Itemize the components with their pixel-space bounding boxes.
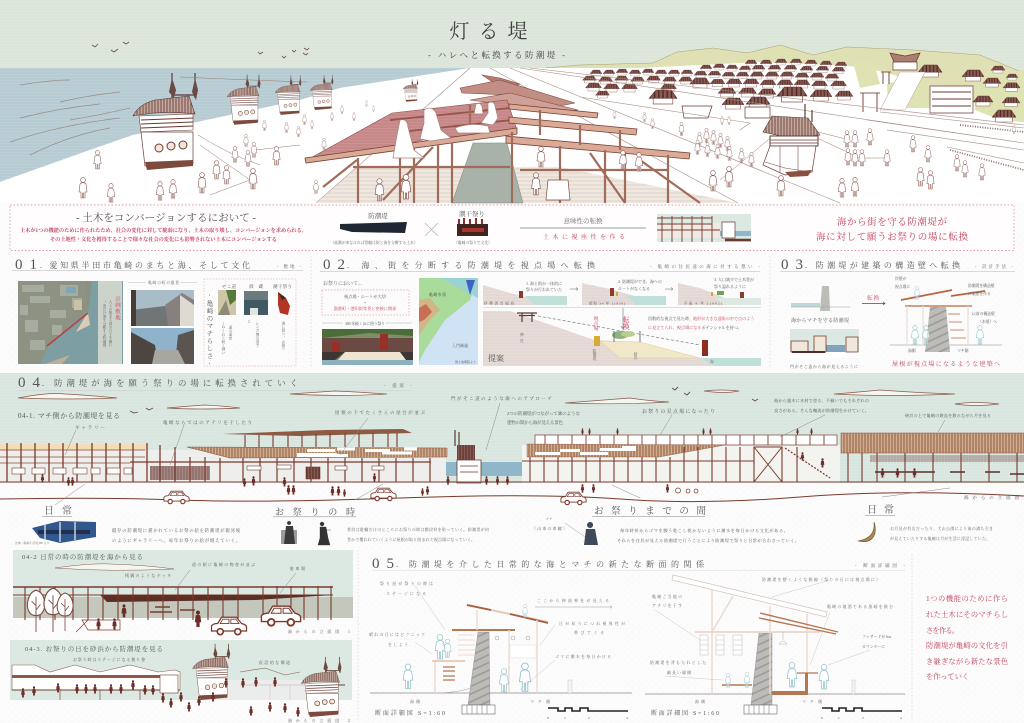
heading 04	[18, 375, 412, 391]
buildings and deck	[12, 665, 345, 700]
town photos	[128, 280, 197, 364]
heading 04: - 提案 -	[384, 382, 412, 389]
heading 03: . 防潮堤が建築の構造壁へ転換	[805, 260, 960, 270]
festival note: +	[364, 300, 367, 304]
panel: hero perspective scene	[0, 0, 1024, 203]
small seawall diagram	[791, 286, 850, 324]
04-2 labels: 駐車場	[289, 566, 305, 571]
elevation: left gallery wall	[0, 443, 446, 483]
caption: until festival: 毎年時折からゴマを腰う乾こし乾かないように潮水を毎日かける文化がある。	[620, 527, 788, 534]
festival note	[322, 280, 409, 315]
proposal section: 転換	[622, 315, 630, 331]
festival photo: 300 年続く山に囲う祭り	[345, 321, 385, 326]
structural diagram: 以前の構造壁	[972, 311, 995, 316]
section A: ここから神前神社が見える	[537, 598, 609, 603]
proposal section: 提案	[488, 353, 504, 363]
caption: until festival	[532, 505, 799, 545]
perspective road lines	[316, 68, 1024, 203]
three historic sections: 昭和 34 年 (1959)	[589, 300, 626, 306]
heading 02: - 亀崎の住民達の海に対する想い -	[650, 263, 760, 270]
section A: ゴマに潮水を毎日かける	[555, 654, 611, 659]
panel: 04-3 festival day from the beach	[10, 640, 352, 723]
elevation: right deck	[522, 435, 840, 483]
meaning shift	[520, 216, 646, 241]
caption: everyday right: が見えていたりする亀崎は月が生活に深浸していた。	[890, 535, 990, 541]
thumbnail view through gate: 門がそこ造から海が見えるように	[790, 363, 858, 369]
town character box: 潮干祭り	[273, 283, 292, 290]
section B: 亀崎の地酒である黒暗を飲む	[827, 604, 893, 609]
small seawall diagram: 海からマチを守る防潮堤	[791, 317, 849, 324]
roof beams	[305, 104, 690, 163]
banner heading: - 土木をコンバージョンするにおいて -	[76, 211, 256, 224]
barrel	[546, 180, 570, 200]
town character box	[204, 279, 296, 366]
panel: section 02	[320, 257, 761, 366]
wall B	[751, 633, 772, 705]
panel: section 05	[369, 556, 906, 720]
section A: 断面詳細図 S=1:60	[375, 709, 445, 717]
heading 05: 05	[372, 556, 394, 572]
callouts: 屋根の下でたくさんの屋台が並ぶ	[335, 409, 426, 416]
structural diagram: マチ側	[957, 348, 969, 353]
proposal section: 社	[520, 337, 524, 343]
callouts: 良さがある。そんな軸流が防潮堤をかけていく。	[774, 407, 869, 414]
04-2 labels	[125, 562, 350, 634]
clouds	[18, 390, 999, 409]
caption: festival: 普段は駐輪だけのところにお祭りの時は階段材を貼っていく。防潮堤が何	[347, 526, 489, 532]
heading 04-3: 04-3. お祭りの日を砂浜から防潮堤を見る	[25, 644, 163, 653]
panel: section 03	[780, 257, 1015, 369]
closing statement: を作っていく	[926, 672, 969, 681]
heading 02: . 海、街を分断する防潮堤を視点場へ転換	[347, 260, 595, 270]
grey wall	[13, 597, 353, 618]
structural diagram: 視点場に	[895, 284, 910, 289]
town character box: 道の遠景	[228, 324, 233, 340]
aerial map	[18, 281, 123, 364]
far roofs	[460, 75, 578, 112]
town character box: 酒蔵	[249, 283, 264, 290]
structural diagram: 海側	[908, 348, 916, 353]
heading 05	[372, 556, 906, 572]
festival note: 視点場・ルートが大切	[344, 293, 387, 300]
section A: 帯びてくる	[574, 630, 604, 635]
wall A	[468, 632, 490, 705]
callout leader lines	[55, 403, 950, 505]
callouts: 海から風木に木材で登る、不揃いでもそれぞれの	[774, 397, 869, 404]
caption: until festival: お祭りまでの間	[594, 505, 706, 517]
long roof B	[672, 575, 827, 617]
three historic sections: 平成 4 年 (1992)	[684, 300, 723, 306]
town character box: せこ道	[222, 283, 236, 290]
callouts: 2つの防潮堤がつながって廊のような	[507, 410, 580, 417]
heading 03: 03	[781, 257, 803, 273]
section A: 晴れの日にはピクニック	[369, 632, 425, 637]
proposal section: 防潮堤	[592, 348, 597, 361]
closing statement	[926, 594, 1008, 681]
thumbnail elevation	[657, 214, 751, 242]
transform arrow: 転換	[867, 294, 879, 302]
festival image	[454, 209, 492, 245]
proposal section: 視点場	[592, 315, 598, 332]
callouts: 砂浜の上で亀崎の飲品を飲みながら月を見る	[905, 412, 991, 418]
structural diagram: に架屋を作る	[968, 291, 991, 296]
structural diagram: 屋根が視点場になるような建築へ	[892, 360, 1000, 368]
banner body text: 土木が1つの機能のために作られたため、社会の変化に対して脆弱になり、土木の取り壊し、コンバージョンを求められる。	[20, 226, 307, 234]
stairway	[880, 72, 925, 110]
heading 02: 02	[323, 257, 345, 273]
proposal section: 海	[710, 359, 714, 364]
panel: concept banner	[10, 205, 1014, 250]
panel: 04-2 elevation from the sea	[13, 550, 353, 635]
deck and posts	[13, 586, 333, 620]
shrine gate	[890, 53, 920, 70]
structural diagram: （木壁）へ	[978, 319, 997, 324]
caption: everyday left: のようにギャラリーへ。毎年お祭りの絵が増えていく。	[112, 537, 240, 544]
hills	[545, 45, 1024, 125]
section A: 日が昇りにつれ視界性が	[559, 621, 625, 626]
subtitle: - ハレへと転換する防潮堤 -	[428, 50, 565, 60]
town character box: くねくねと続く細い	[221, 321, 226, 355]
bicycles	[676, 488, 698, 493]
heading 03: - 設計手法 -	[975, 263, 1014, 270]
section A: 祭り屋が祭りの時は	[380, 581, 433, 586]
section B: カウンターに	[862, 644, 885, 649]
panel: section 01	[12, 257, 303, 366]
topographic map	[419, 278, 478, 365]
seawall image	[330, 211, 418, 245]
cross symbol	[425, 223, 438, 236]
deck floor	[316, 167, 738, 203]
callouts: ギャラリー	[75, 424, 105, 431]
caption: festival: 者かで覆われていくように屋根が取り囲まれて視点場になっていく。	[347, 536, 475, 542]
callouts	[18, 395, 1020, 501]
torii gates	[860, 72, 891, 112]
callouts: 門がそこ道のような海へのアプローチ	[451, 395, 552, 402]
structural diagram: 岸壁が	[895, 276, 907, 281]
scale bar B: 1	[838, 716, 840, 720]
figures and cars	[76, 604, 301, 635]
elevation: wood roof right	[841, 433, 1024, 482]
right float	[763, 104, 820, 177]
three historic sections: 1. 海と街が一体的に	[526, 280, 562, 286]
topographic map: 亀崎市街	[429, 292, 446, 297]
caption: everyday right	[858, 503, 993, 542]
scale bar B	[821, 708, 902, 720]
white facade building	[682, 86, 973, 118]
banner body text	[20, 226, 307, 243]
three historic sections	[483, 276, 761, 308]
caption: everyday left: 既存の防潮堤に描かれているお祭の絵を防潮堤が親河坡	[112, 527, 241, 534]
caption: everyday left: 日常	[44, 504, 72, 517]
festival image: 潮干祭り	[459, 209, 485, 218]
section B: 防潮堤を背もたれとした	[650, 660, 706, 665]
scale bar A: 1	[564, 716, 566, 720]
rail track	[950, 125, 1024, 170]
heading 04-2: 04-2 日常の時の防潮堤を海から見る	[22, 552, 143, 561]
sea gap	[446, 462, 528, 476]
banner body text: その土地性・文化を獲得することで様々な社会の変化にも影響されない土木にコンバージョンする	[50, 235, 277, 243]
dark rafters on roof	[390, 108, 512, 132]
birds	[92, 42, 309, 58]
callouts: 海からの立面図	[964, 494, 1020, 501]
section B: 防潮堤を整くような動線（祭りの日には視点場に）	[762, 577, 880, 582]
heading 04: . 防潮堤が海を願う祭りの場に転換されていく	[42, 378, 298, 388]
structure posts and braces	[323, 105, 700, 203]
aerial map: 計画敷地	[114, 295, 121, 321]
town roofs	[582, 59, 1020, 122]
proposal section: 神	[520, 331, 524, 337]
proposal section	[483, 308, 761, 366]
birds	[130, 387, 758, 413]
scale bar A	[547, 708, 628, 720]
heading 05: - 断面詳細図 -	[855, 562, 906, 569]
torii	[517, 313, 537, 322]
three historic sections: 3. 人口減少で土木景が	[714, 276, 754, 282]
key message	[816, 216, 968, 243]
heading 01: . 愛知県半田市亀崎のまちと海、そして文化	[40, 260, 250, 270]
town character box: - 亀崎のマチらしさ -	[206, 294, 213, 366]
caption: until festival: ゴマ	[545, 516, 553, 521]
town character box: に	[247, 319, 252, 323]
closing statement: き継ぎながら新たな景色	[926, 657, 1008, 666]
section B: 海側	[695, 699, 705, 704]
roof A	[467, 605, 548, 622]
float	[455, 430, 481, 483]
transform arrow	[862, 294, 885, 305]
caption: festival	[273, 506, 489, 545]
festival note: 漁港町・港印街等景と密接に関係	[334, 305, 397, 312]
heading 02	[320, 257, 760, 273]
section A	[369, 581, 632, 720]
section A: 海側	[410, 699, 420, 704]
caption: until festival: （山車の車輪）	[532, 525, 567, 531]
crowd	[79, 100, 1016, 202]
key message: 海に対して願うお祭りの場に転換	[816, 231, 968, 243]
04-3 labels	[73, 657, 350, 723]
cars	[164, 488, 586, 505]
seawall image: 防潮堤	[368, 211, 388, 220]
heading 03	[780, 257, 1015, 273]
caption: everyday right: お月見が有名だったり、大山公園により海の満ち引き	[890, 525, 993, 531]
section B: マチ側	[802, 699, 822, 704]
04-3 labels: お祭り時はステージになる拠り巻	[73, 657, 145, 662]
elevation: central market roof	[130, 429, 447, 482]
topographic map: 入門梯級	[452, 343, 468, 348]
floats	[192, 644, 341, 717]
scale bar B: 2	[862, 716, 864, 720]
scale bar B: 0	[821, 716, 823, 720]
panel: section 04 elevation	[0, 373, 1024, 505]
04-3 labels: 海からの立面図 2	[288, 718, 350, 723]
meaning shift: 意味性の転換	[564, 216, 603, 225]
thumbnail view through gate	[790, 329, 859, 369]
float ropes	[180, 77, 890, 195]
caption: festival: お祭りの時	[275, 506, 355, 517]
town photos: 亀崎の町の風景	[148, 280, 179, 285]
closing statement: れた土木にそのマチらし	[926, 610, 1008, 619]
big pink roof	[307, 100, 517, 160]
04-2 labels: 桟橋のようなデッキ	[125, 573, 171, 578]
section B: 細長い縁側	[667, 670, 691, 675]
large seated figures on roof	[393, 102, 498, 158]
caption: everyday left: 出典 : 亀崎小学校 HP より	[15, 540, 50, 545]
ground line	[0, 482, 1024, 502]
structural diagram: 防潮堤を構造壁	[968, 283, 995, 288]
callouts: 建物の間から海が見える景色	[507, 419, 564, 426]
seawall	[452, 143, 523, 203]
festival floats	[133, 73, 418, 170]
scale bar A: 0	[547, 716, 549, 720]
section A: ステージになる	[386, 591, 426, 596]
section B: ファサードが bar	[862, 634, 892, 639]
heading 01	[12, 257, 303, 273]
caption: until festival: それらを住民が見える防潮堤で行うことにより防潮堤で祭りと日常が合わさっていく。	[617, 537, 799, 544]
heading 01: 01	[15, 257, 37, 273]
festival note: お祭りにおいて...	[323, 280, 362, 287]
sight line	[538, 316, 700, 345]
section A: マチ側	[530, 699, 550, 704]
seawall image: （高潮が来なければ景観は街と海を分断する土木）	[330, 240, 418, 245]
heading 05: . 防潮堤を介した日常的な海とマチの新たな断面的関係	[396, 559, 705, 569]
scale bar B: 4	[900, 716, 902, 720]
section A: をしよう	[388, 642, 408, 647]
closing statement: 1つの機能のために作ら	[926, 594, 1008, 603]
section B: アテリを干す	[652, 603, 682, 608]
band sky	[0, 373, 1024, 483]
green slopes	[853, 60, 1024, 122]
04-2 labels: 道の駅に亀崎の物産が並ぶ	[192, 562, 255, 567]
section B: 断面詳細図 S=1:60	[651, 709, 719, 717]
closing statement: さを作る。	[926, 626, 959, 635]
trees	[27, 588, 73, 632]
section B	[645, 575, 905, 720]
cloud	[55, 564, 174, 570]
dividers	[311, 256, 912, 720]
topographic map: 国土地理院より	[455, 359, 476, 364]
04-3 labels: 仮設的な舞砲	[259, 660, 290, 665]
three historic sections: 2. 防潮堤ができ、海への	[618, 278, 662, 284]
proposal section: 回数的な視点で見た時、地形が大きな遠街の中で点のよう	[648, 315, 754, 321]
aerial map: 人々の集まる祭の日々を願い	[108, 299, 113, 347]
beach people	[21, 677, 300, 717]
section B: 亀崎ご当地の	[652, 594, 682, 599]
proposal section: に見立てられ、視点場になるポテンシャルを持つ。	[648, 324, 742, 330]
sea	[0, 68, 470, 182]
proposal section: 砂浜	[633, 351, 638, 360]
meaning shift: 土木に視座性を作る	[543, 233, 625, 241]
wave lines	[10, 80, 130, 155]
white ground	[0, 62, 1024, 203]
closing statement: 防潮堤が亀崎の文化を引	[926, 641, 1008, 650]
three historic sections: 祭り溢れるように	[714, 283, 746, 289]
title: 灯る堤	[450, 20, 536, 43]
caption: everyday left	[15, 504, 241, 545]
callouts: お祭りの見点場になったり	[642, 408, 715, 415]
festival photo	[322, 321, 413, 365]
structural diagram	[890, 276, 1002, 368]
caption: everyday right: 日常	[867, 503, 894, 516]
scale bar A: 2	[588, 716, 590, 720]
three historic sections: 伊勢湾台風前	[484, 300, 514, 306]
scale bar A: 4	[626, 716, 628, 720]
elevation people	[41, 428, 916, 497]
aerial map: 一度だけ海を分断する防潮堤	[102, 300, 107, 347]
town character box: 海に祭り、お祭り	[281, 320, 286, 351]
three historic sections: ルートがなくなる	[618, 285, 650, 291]
heading 04: 04	[18, 375, 40, 391]
festival image: （亀崎の祭りで文化）	[454, 240, 492, 245]
callouts: 亀崎ならではのアテリを干したり	[163, 419, 252, 426]
key message: 海から街を守る防潮堤が	[837, 216, 947, 228]
callouts: 04-1. マチ側から防潮堤を見る	[18, 411, 120, 420]
04-2 labels: 海からの立面図 1	[288, 629, 350, 634]
three historic sections: 祭りが行われていた	[526, 286, 562, 292]
town character box: レンガ煉瓦造で	[255, 321, 260, 347]
sky	[0, 0, 1024, 135]
panel: four scene captions	[15, 503, 993, 545]
heading 01: - 敷地 -	[277, 263, 302, 270]
